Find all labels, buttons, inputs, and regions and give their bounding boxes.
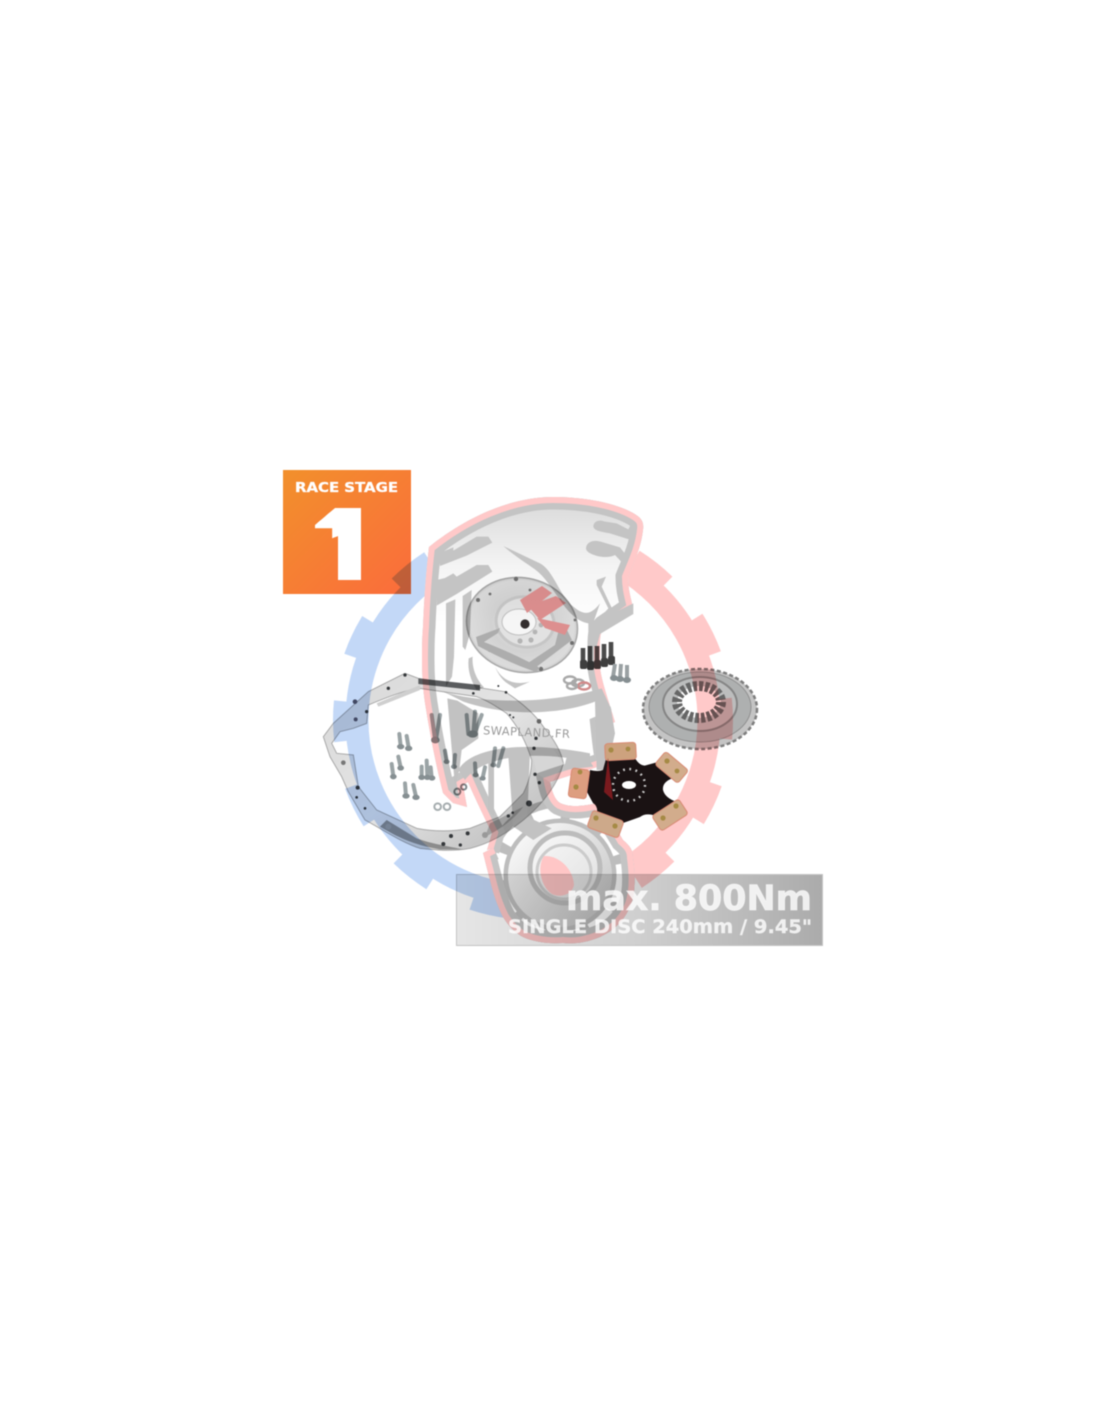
loose washers xyxy=(434,784,466,810)
site watermark: SWAPLAND.FR xyxy=(483,723,570,741)
badge: race stage 1 xyxy=(282,469,412,595)
center hole xyxy=(687,692,709,710)
bolt heads dark xyxy=(580,656,615,670)
rod shaft shading xyxy=(508,753,552,840)
flywheel grey overlay arcs xyxy=(476,625,572,672)
flywheel xyxy=(456,566,588,684)
gear right half: red xyxy=(628,550,734,888)
adapter plate ring xyxy=(323,673,563,850)
bolt shafts xyxy=(392,712,503,797)
pad rivets xyxy=(573,747,679,829)
badge numeral: 1 xyxy=(304,466,385,609)
face guard xyxy=(503,546,633,647)
left wedge xyxy=(447,698,478,787)
red emblem reflection on flywheel xyxy=(520,586,570,635)
lower helmet and rod xyxy=(443,688,615,840)
pressure plate xyxy=(643,669,757,749)
small bolt heads xyxy=(610,675,631,683)
badge square xyxy=(283,470,411,594)
bolt heads xyxy=(390,730,496,800)
disc hub holes xyxy=(613,769,645,801)
bolt shafts xyxy=(583,642,611,666)
gear emblem xyxy=(332,550,734,918)
cheek curl xyxy=(495,667,530,688)
flywheel hub xyxy=(502,609,543,644)
torque rating box xyxy=(456,874,822,946)
disc center hole xyxy=(622,781,636,789)
flywheel inner ring xyxy=(491,592,559,652)
clutch disc xyxy=(568,742,689,838)
right rod strap xyxy=(595,702,615,770)
adapter plate with bolts xyxy=(323,673,563,850)
disc body xyxy=(587,755,677,823)
helmet stripes left xyxy=(437,537,492,690)
emblem overlay streak on disc xyxy=(604,758,613,800)
friction pads xyxy=(568,742,689,838)
helmet stripes right xyxy=(586,521,633,618)
helmet lower band xyxy=(443,688,612,712)
flywheel disc xyxy=(456,566,588,684)
plate holes xyxy=(341,673,541,847)
washers xyxy=(564,676,590,690)
rating headline: max. 800Nm xyxy=(566,879,812,919)
badge label: RACE STAGE xyxy=(295,480,398,496)
shield emblem with helmet and connecting rod xyxy=(415,490,650,951)
plate chrome shading xyxy=(377,678,563,849)
rod small strip xyxy=(488,757,494,817)
dark flywheel bolts xyxy=(564,642,631,690)
infographic canvas xyxy=(282,469,824,946)
outer toothed ring xyxy=(643,669,757,749)
rating subline: SINGLE DISC 240mm / 9.45" xyxy=(508,916,812,938)
rod collar arc xyxy=(458,747,590,780)
diaphragm fingers xyxy=(677,686,721,718)
rating box background xyxy=(456,874,822,946)
cover ring xyxy=(663,677,737,731)
helmet details xyxy=(437,521,633,690)
rod right strap xyxy=(563,757,593,770)
gear left half: blue xyxy=(332,552,504,918)
cover xyxy=(649,672,751,742)
flywheel rim bolts xyxy=(476,577,576,671)
small silver bolts xyxy=(613,664,627,679)
rod big end xyxy=(499,800,622,931)
shield fill and outline xyxy=(415,490,650,951)
